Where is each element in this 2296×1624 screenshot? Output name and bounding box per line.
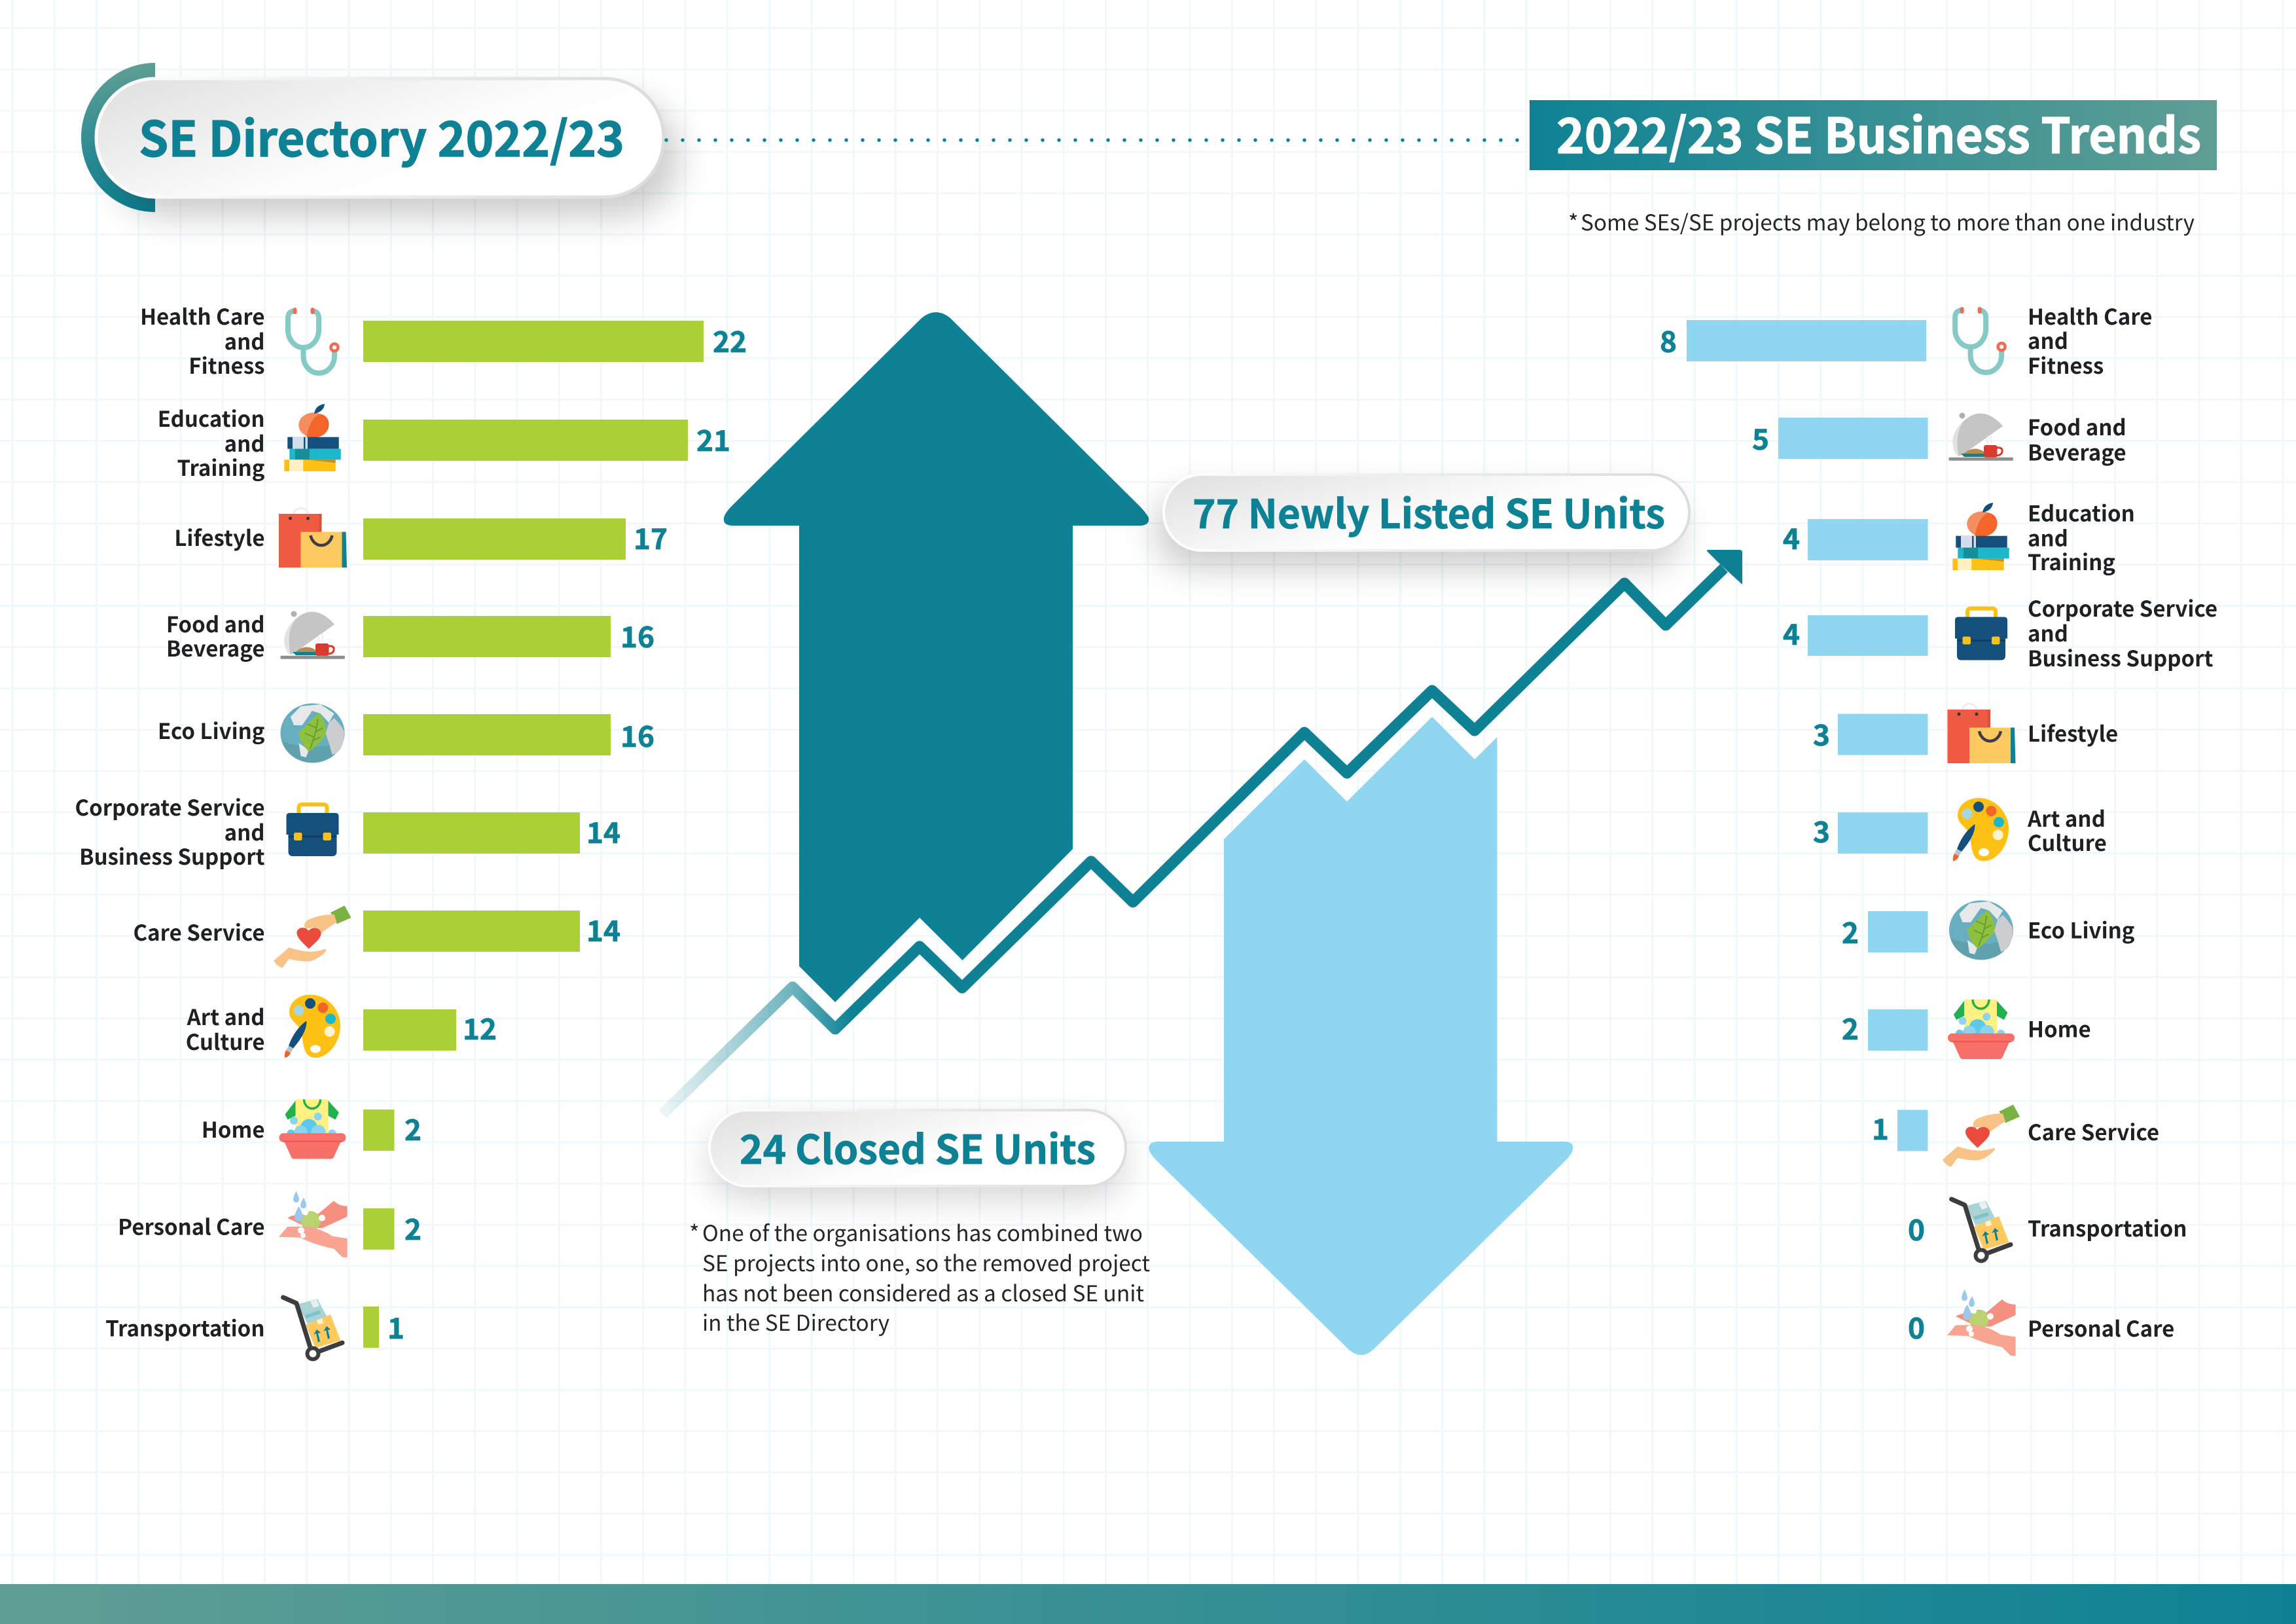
row: Personal Care xyxy=(118,1191,422,1257)
row: Food and Beverage: Food and xyxy=(2028,410,2126,442)
row: Food and Beverage: Beverage xyxy=(2028,436,2126,467)
row: Food and Beverage: Food and xyxy=(166,607,264,639)
footnote: closed units: One of the organisations has combined two xyxy=(702,1216,1143,1248)
row: Education and Training: Education xyxy=(158,402,264,433)
row: Lifestyle xyxy=(174,508,668,568)
row: Home xyxy=(202,1100,422,1159)
row: Care Service: 14 xyxy=(586,908,620,950)
title: SE Directory 2022/23: SE Directory 2022/23 xyxy=(139,101,624,171)
row: Home xyxy=(1842,1000,2091,1059)
row: Lifestyle: Lifestyle xyxy=(174,521,264,552)
row: Health Care and Fitness xyxy=(140,300,747,380)
row: Corporate Service and Business Support: Business Support xyxy=(2028,641,2214,673)
heading: 2022/23 SE Business Trends: 2022/23 SE Business Trends xyxy=(1556,98,2201,168)
row: Personal Care: 2 xyxy=(404,1206,422,1248)
title: SE Directory 2022/23 xyxy=(81,63,679,217)
row: Education and Training: and xyxy=(2028,521,2068,552)
note: multiple industries: * xyxy=(1568,205,1579,237)
row: Care Service: Care Service xyxy=(133,916,264,947)
row: Health Care and Fitness: and xyxy=(224,325,264,356)
row: Transportation: Transportation xyxy=(2028,1212,2187,1243)
row: Art and Culture: Culture xyxy=(186,1025,264,1056)
row: Eco Living: Eco Living xyxy=(2028,914,2135,945)
row: Art and Culture: 12 xyxy=(463,1006,497,1048)
row: Eco Living xyxy=(1842,901,2135,960)
row: Health Care and Fitness: 22 xyxy=(713,319,747,361)
row: Corporate Service and Business Support xyxy=(75,791,620,871)
callout: 24 Closed SE Units xyxy=(709,1110,1126,1199)
callout: 77 Newly Listed SE Units xyxy=(1155,475,1689,568)
footnote: closed units xyxy=(689,1216,1150,1337)
row: Food and Beverage: 5 xyxy=(1752,416,1769,458)
note: multiple industries: Some SEs/SE projects may belong to more than one industry xyxy=(1581,205,2195,237)
row: Lifestyle xyxy=(1813,704,2118,763)
row: Health Care and Fitness: Health Care xyxy=(2028,300,2152,331)
row: Food and Beverage xyxy=(1752,410,2126,467)
row: Care Service xyxy=(133,906,620,968)
footnote: closed units: * xyxy=(689,1216,700,1248)
row: Education and Training: 21 xyxy=(696,418,730,460)
row: Art and Culture: 3 xyxy=(1813,809,1830,851)
callout: 77 Newly Listed SE Units: 77 Newly Listed SE Units xyxy=(1193,482,1665,540)
row: Care Service: Care Service xyxy=(2028,1115,2159,1147)
row: Corporate Service and Business Support: 4 xyxy=(1783,611,1800,653)
row: Education and Training: Training xyxy=(2028,545,2115,577)
row: Lifestyle: 17 xyxy=(634,516,668,558)
row: Home: Home xyxy=(2028,1012,2091,1043)
row: Corporate Service and Business Support: Business Support xyxy=(79,840,265,871)
row: Home: Home xyxy=(202,1113,264,1144)
footnote: closed units: has not been considered as a closed SE unit xyxy=(702,1276,1144,1308)
row: Education and Training: Training xyxy=(177,451,265,482)
row: Art and Culture xyxy=(1813,798,2107,861)
row: Personal Care: Personal Care xyxy=(118,1210,264,1241)
footnote: closed units: SE projects into one, so the removed project xyxy=(702,1246,1150,1278)
chart: SE Directory by industry xyxy=(75,300,747,1359)
row: Art and Culture: Culture xyxy=(2028,826,2107,857)
row: Corporate Service and Business Support xyxy=(1783,592,2217,673)
down arrow: closed xyxy=(1149,717,1573,1355)
row: Art and Culture: Art and xyxy=(187,1000,264,1032)
row: Lifestyle: 3 xyxy=(1813,712,1830,754)
row: Home: 2 xyxy=(404,1107,422,1149)
row: Health Care and Fitness: 8 xyxy=(1660,319,1677,361)
row: Education and Training xyxy=(1783,496,2135,577)
row: Eco Living: 16 xyxy=(620,713,655,755)
row: Art and Culture: Art and xyxy=(2027,802,2106,833)
row: Education and Training xyxy=(158,402,730,482)
row: Eco Living: 2 xyxy=(1842,910,1859,952)
row: Home: 2 xyxy=(1842,1006,1859,1048)
row: Food and Beverage: 16 xyxy=(620,614,655,656)
row: Personal Care: 0 xyxy=(1908,1305,1925,1347)
row: Health Care and Fitness: Fitness xyxy=(2028,349,2104,380)
row: Transportation: Transportation xyxy=(105,1312,264,1343)
up arrow: newly listed xyxy=(724,312,1149,1002)
row: Education and Training: Education xyxy=(2028,496,2135,528)
row: Lifestyle: Lifestyle xyxy=(2028,717,2118,748)
row: Education and Training: and xyxy=(224,427,264,458)
footnote: closed units: in the SE Directory xyxy=(702,1305,889,1337)
row: Food and Beverage xyxy=(166,607,655,663)
row: Corporate Service and Business Support: and xyxy=(224,816,264,847)
row: Corporate Service and Business Support: Corporate Service xyxy=(75,791,264,822)
row: Transportation xyxy=(105,1297,404,1359)
row: Corporate Service and Business Support: and xyxy=(2028,617,2068,648)
footer band xyxy=(0,1584,2296,1624)
callout: 24 Closed SE Units: 24 Closed SE Units xyxy=(740,1117,1096,1176)
row: Personal Care: Personal Care xyxy=(2028,1312,2174,1343)
row: Transportation xyxy=(1908,1199,2187,1261)
row: Eco Living: Eco Living xyxy=(158,714,265,746)
chart: Business Trends by industry xyxy=(1660,300,2217,1356)
dotted connector xyxy=(666,138,1522,142)
row: Health Care and Fitness: Health Care xyxy=(140,300,264,331)
row: Education and Training: 4 xyxy=(1783,516,1800,558)
row: Corporate Service and Business Support: Corporate Service xyxy=(2028,592,2217,623)
row: Eco Living xyxy=(158,703,655,763)
row: Transportation: 0 xyxy=(1908,1207,1925,1249)
row: Health Care and Fitness: Fitness xyxy=(188,349,264,380)
rising zigzag trend arrow xyxy=(662,550,1742,1114)
row: Care Service xyxy=(1872,1105,2159,1167)
row: Corporate Service and Business Support: 14 xyxy=(586,810,620,852)
row: Food and Beverage: Beverage xyxy=(166,632,264,663)
row: Transportation: 1 xyxy=(387,1305,404,1347)
row: Art and Culture xyxy=(186,995,497,1058)
row: Personal Care xyxy=(1908,1290,2174,1356)
row: Care Service: 1 xyxy=(1872,1106,1889,1148)
row: Health Care and Fitness xyxy=(1660,300,2152,380)
row: Health Care and Fitness: and xyxy=(2028,324,2068,355)
